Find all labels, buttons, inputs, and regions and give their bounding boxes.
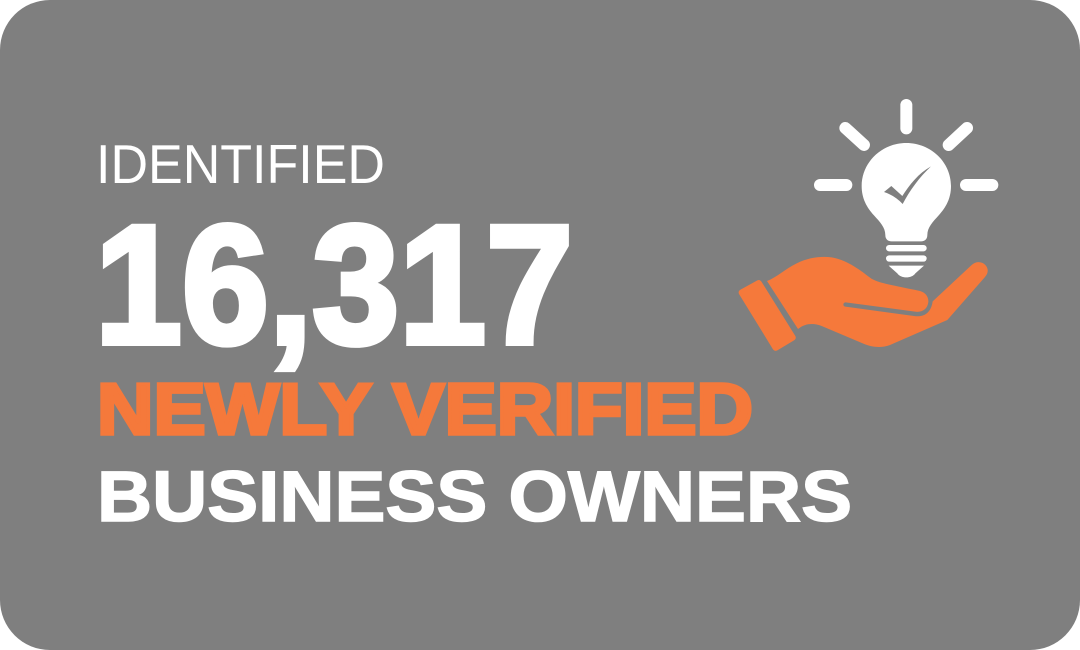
icon: open hand	[739, 257, 988, 351]
text: business owners: BUSINESS OWNERS	[97, 458, 852, 537]
icon: light bulb over open hand	[739, 105, 992, 351]
text: newly verified: NEWLY VERIFIED	[97, 370, 753, 450]
icon: light rays	[820, 105, 992, 185]
text: identified: IDENTIFIED	[96, 133, 385, 195]
icon: bulb with check mark	[862, 143, 951, 277]
text: big number 16,317: 16,317	[95, 190, 573, 379]
